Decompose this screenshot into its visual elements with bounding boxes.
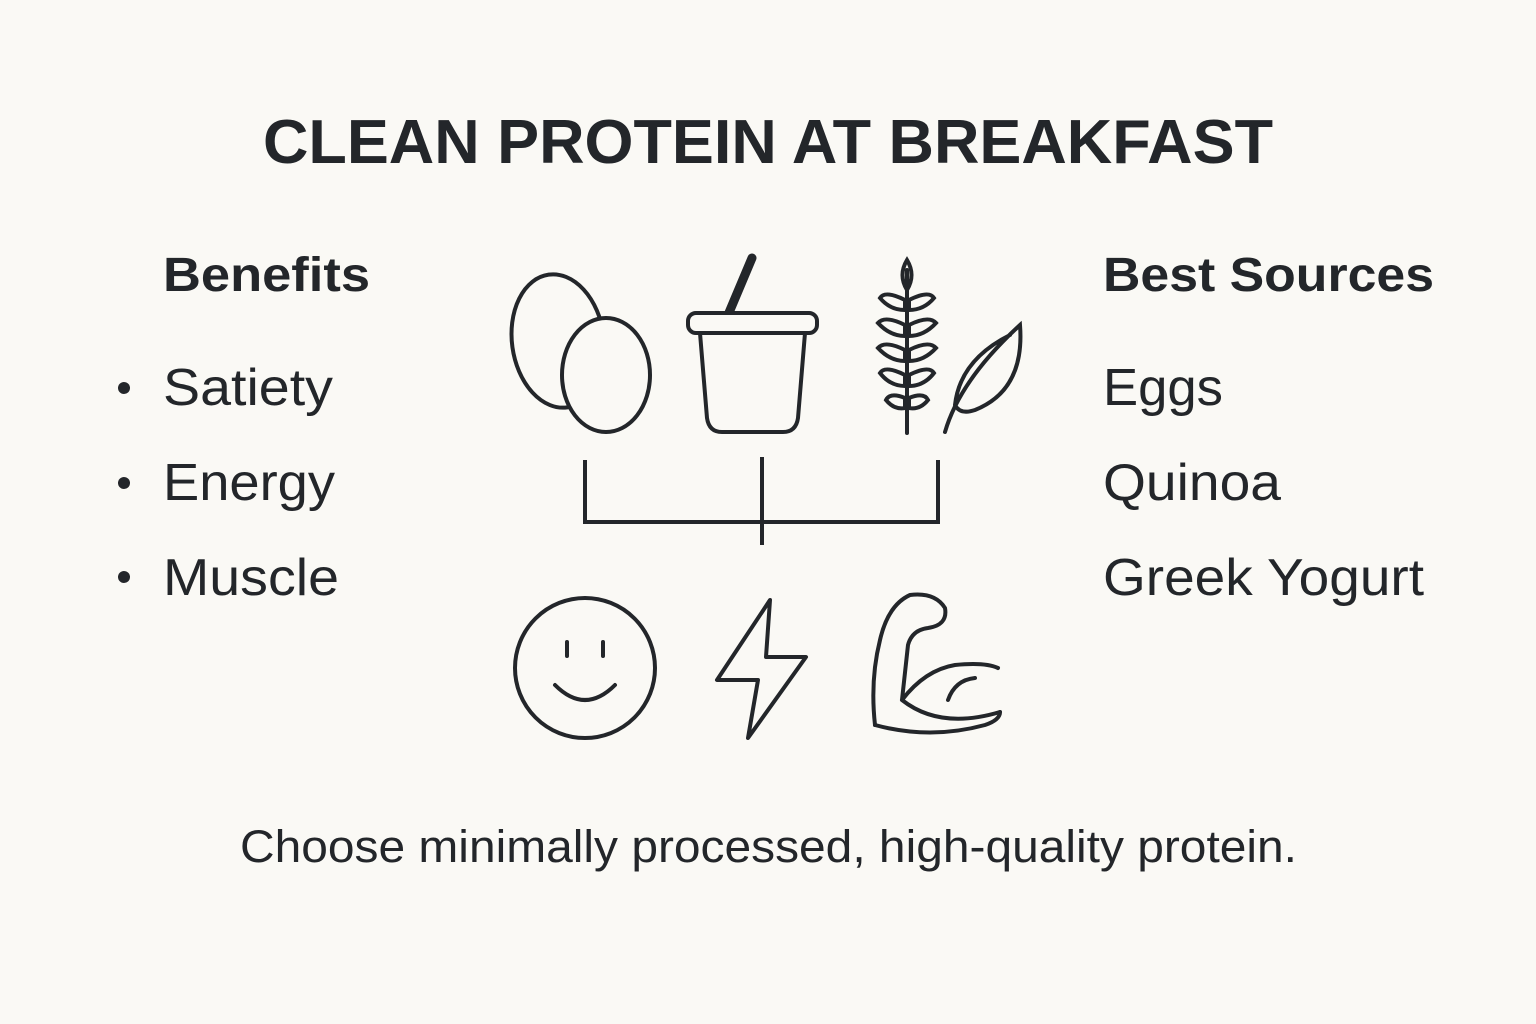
icon: wheat and leaf: [878, 260, 1020, 433]
icon: smiley: [515, 598, 655, 738]
title: CLEAN PROTEIN AT BREAKFAST: [263, 108, 1273, 177]
panel: benefits: [118, 249, 370, 607]
list: sources items: Greek Yogurt: [1103, 549, 1425, 607]
list: benefits items: [118, 359, 339, 607]
list: sources items: Quinoa: [1103, 454, 1281, 512]
icon: lightning bolt: [717, 600, 806, 738]
icon: eggs: [503, 268, 650, 432]
list: sources items: [1103, 359, 1425, 607]
list: benefits items: Muscle: [163, 549, 339, 607]
icon: flexed arm: [873, 595, 1000, 732]
list: benefits items: Satiety: [163, 359, 333, 417]
list: benefits items: Energy: [163, 454, 335, 512]
footer text: Choose minimally processed, high-quality protein.: [240, 821, 1297, 872]
connector bracket: [585, 457, 938, 545]
panel: best sources: [1103, 249, 1434, 607]
icon: yogurt cup: [688, 258, 817, 432]
list: sources items: Eggs: [1103, 359, 1223, 417]
heading: benefits: Benefits: [163, 249, 370, 302]
heading: best sources: Best Sources: [1103, 249, 1434, 302]
